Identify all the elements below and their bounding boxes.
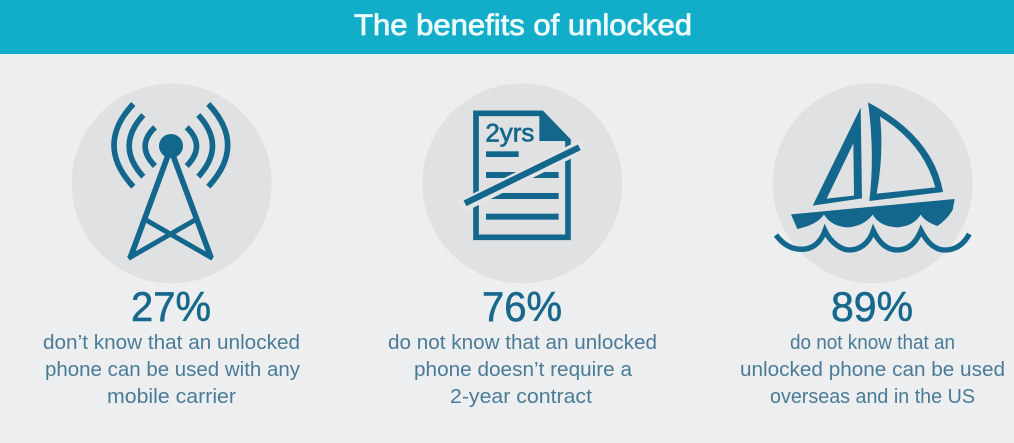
icon: cell tower in circle xyxy=(72,83,272,283)
title banner xyxy=(0,0,1014,54)
statistic: 76%: 76% xyxy=(482,283,562,330)
description: carrier: don’t know that an unlocked xyxy=(43,332,300,354)
title banner: The benefits of unlocked xyxy=(354,9,692,42)
statistic: 89%: 89% xyxy=(831,283,913,330)
panel: no contract xyxy=(388,83,657,408)
icon: contract document in circle xyxy=(422,83,622,283)
description: contract: phone doesn’t require a xyxy=(414,359,633,381)
description: carrier: mobile carrier xyxy=(107,386,236,408)
description: overseas: unlocked phone can be used xyxy=(740,359,1005,381)
description: carrier: phone can be used with any xyxy=(45,359,300,381)
description: contract xyxy=(388,332,657,408)
description: overseas: do not know that an xyxy=(790,332,955,354)
description: contract: do not know that an unlocked xyxy=(388,332,657,354)
panel: overseas use xyxy=(740,83,1005,408)
description: carrier xyxy=(43,332,300,408)
description: overseas: overseas and in the US xyxy=(770,386,975,408)
icon: contract document in circle: 2yrs xyxy=(485,120,534,148)
statistic: 27%: 27% xyxy=(131,283,211,330)
icon: sailboat in circle xyxy=(773,83,973,283)
description: overseas xyxy=(740,332,1005,408)
description: contract: 2-year contract xyxy=(450,386,592,408)
panel: any mobile carrier xyxy=(43,83,300,408)
